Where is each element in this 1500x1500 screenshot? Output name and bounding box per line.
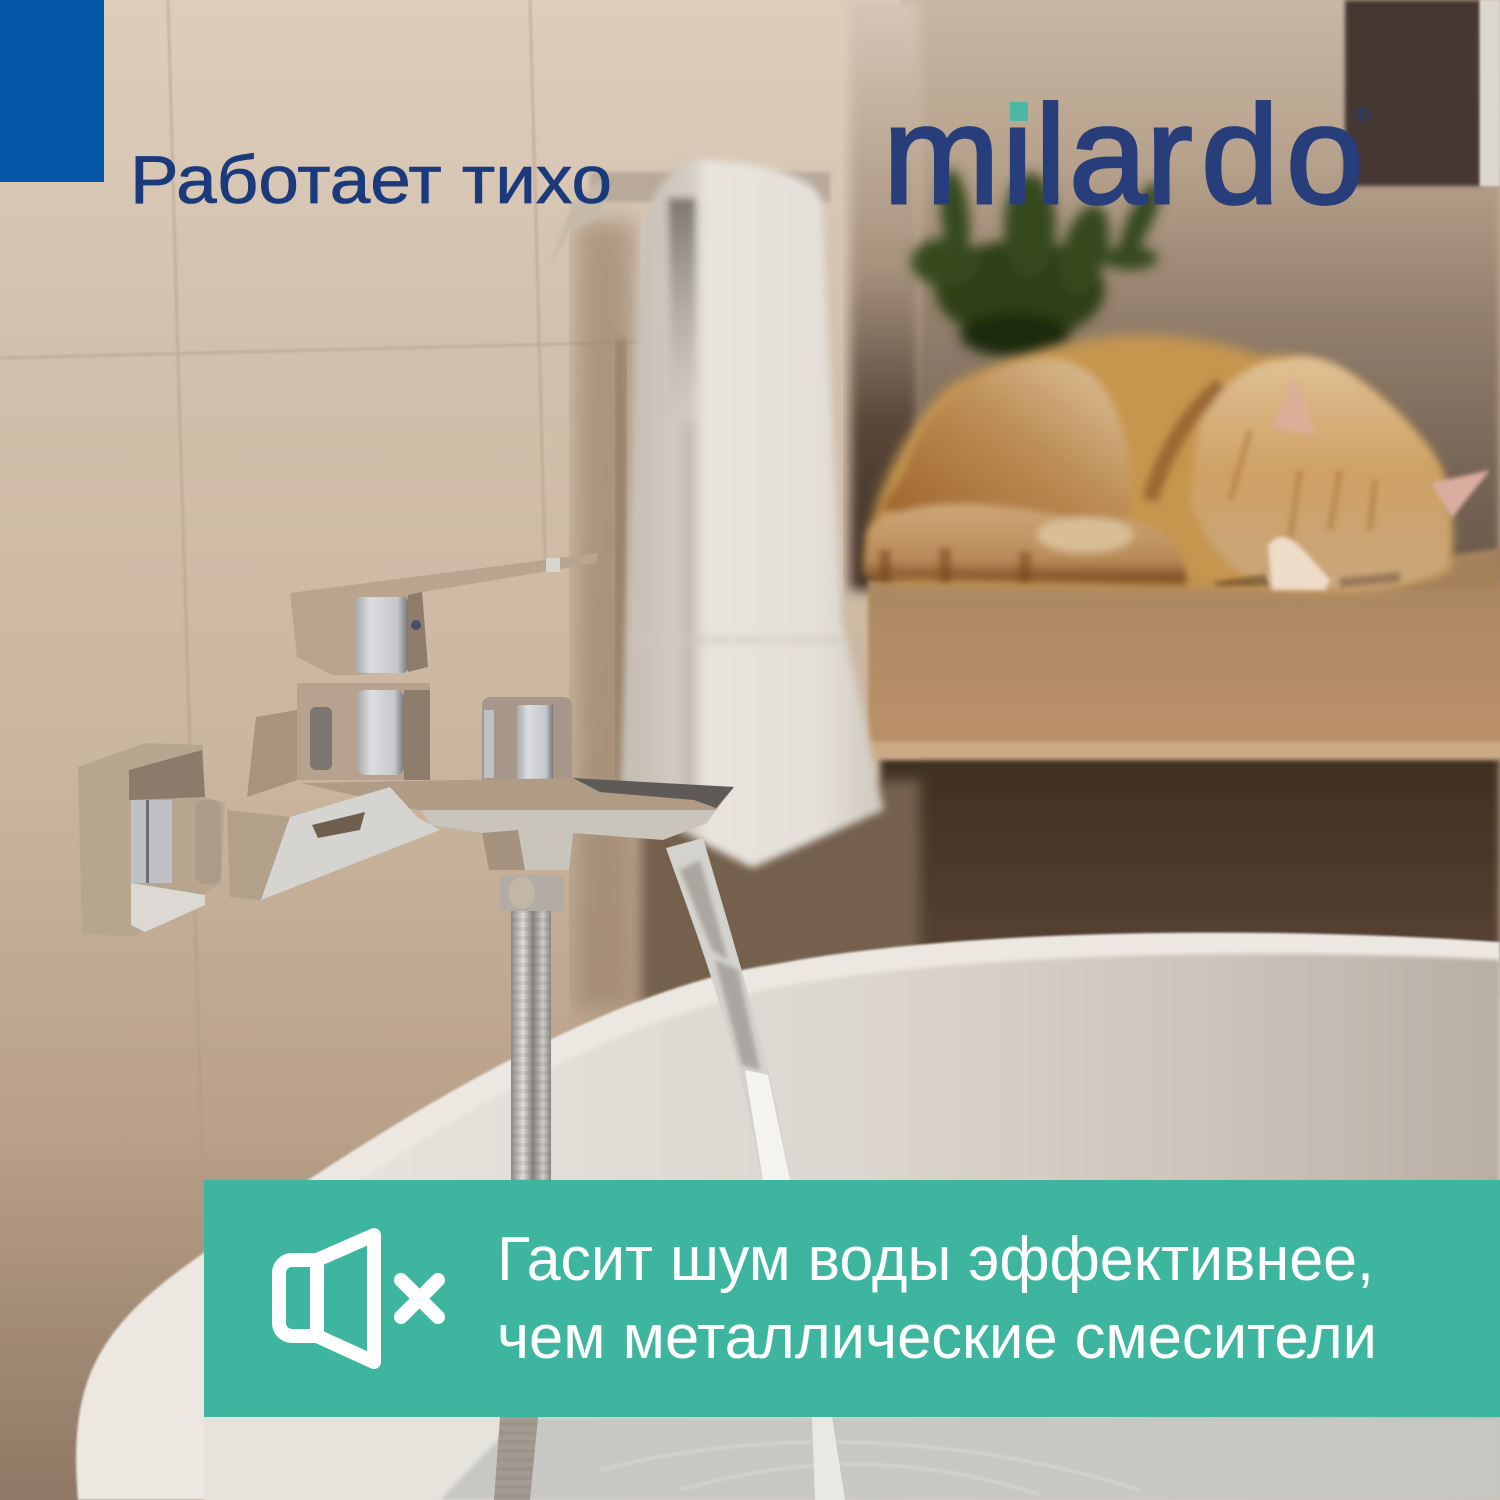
back wall and recess bbox=[640, 0, 1500, 1010]
cat bbox=[866, 335, 1490, 591]
corner accent block bbox=[0, 0, 104, 182]
water stream bbox=[666, 838, 845, 1500]
brand logo: milardo: milardo bbox=[883, 76, 1364, 233]
callout text: Гасит шум воды эффективнее, bbox=[497, 1225, 1374, 1294]
icon: muted speaker bbox=[279, 1235, 438, 1362]
cat body bbox=[866, 335, 1452, 591]
callout banner bbox=[204, 1180, 1500, 1417]
registered mark: ® bbox=[1355, 102, 1371, 127]
shower hose bbox=[494, 875, 564, 1500]
towel rail bbox=[548, 172, 830, 270]
callout text bbox=[497, 1225, 1377, 1372]
bathtub bbox=[0, 933, 1500, 1500]
back plate bbox=[247, 710, 297, 797]
plant bbox=[911, 168, 1169, 357]
cat details bbox=[885, 376, 1490, 590]
wall mount bbox=[78, 743, 225, 937]
callout text: чем металлические смесители bbox=[497, 1303, 1377, 1372]
tiled wall bbox=[0, 0, 900, 1500]
mixer body bbox=[297, 683, 430, 780]
title: Работает тихо bbox=[130, 142, 612, 218]
diverter knob bbox=[482, 697, 572, 787]
logo dot bbox=[1010, 102, 1028, 121]
spout bbox=[227, 778, 734, 900]
faucet bbox=[78, 553, 734, 937]
cat haunch and tail bbox=[866, 357, 1450, 591]
shelf bbox=[868, 548, 1500, 760]
towel bbox=[620, 160, 884, 868]
lever handle bbox=[290, 553, 598, 675]
